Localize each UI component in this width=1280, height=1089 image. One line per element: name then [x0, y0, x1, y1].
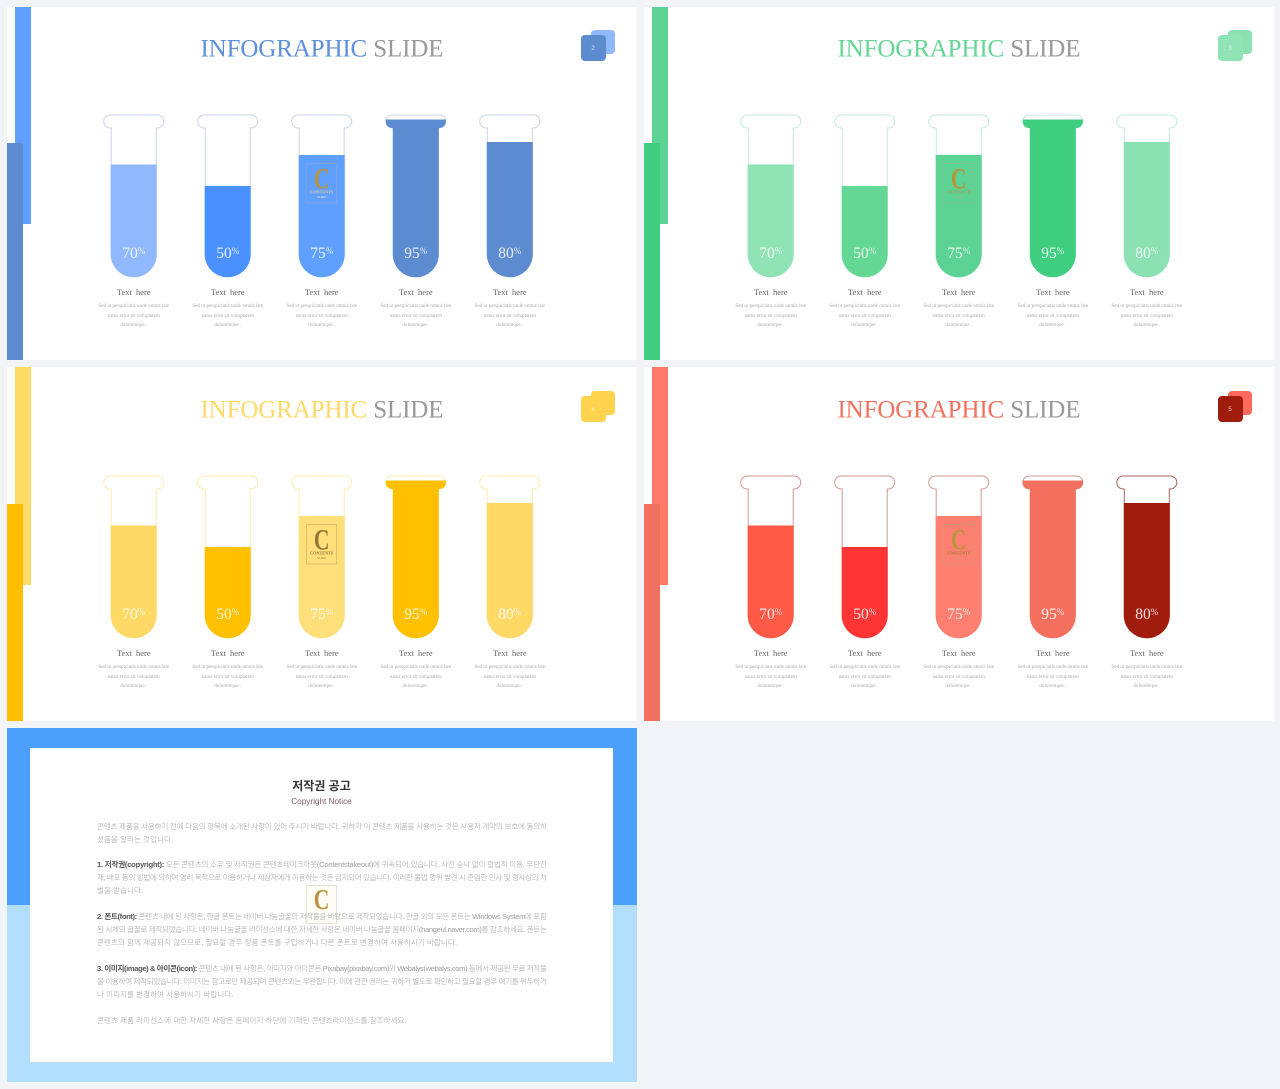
text block: copyright: 1. 저작권(copyright): 모든 콘텐츠의 소유 및 저작권은 콘텐츠테이크아웃(Contentstakeout)에 귀속되어 있습니다. 사전 승낙 없이 합법적 이용, 무단전	[97, 859, 547, 869]
tube 95%: %	[420, 607, 428, 617]
text block: intro: 콘텐츠 제품을 사용하기 전에 다음의 항목에 소개된 사항이 있어 주시기 바랍니다. 귀하가 이 콘텐츠 제품을 사용하는 것은 사용자 계약의 보호에 동의하	[97, 821, 547, 831]
text block: copyright: 벌을 받습니다.	[97, 886, 143, 895]
tube 50%: Sed ut perspiciatis unde omnis iste	[192, 303, 264, 309]
logo: gold C watermark	[306, 884, 336, 924]
tube 80%: 80	[1135, 606, 1151, 623]
icon: page badge	[581, 391, 615, 422]
tube 70%: %	[138, 246, 146, 256]
text block: font: 된 시체의 글꼴로 제작되었습니다. 네이버 나눔글꼴 라이선스에 대한 자세한 사항은 네이버 나눔글꼴 홈페이지(hangeul.naver.com)를 참조하세요. 폰트는	[97, 924, 547, 934]
tube 70%: Text here	[117, 648, 151, 658]
tube 50%	[829, 476, 901, 689]
tube 75% with logo: Text here	[942, 287, 976, 297]
logo: gold C: CONTENTS	[947, 550, 971, 556]
tube 80%: natus error sit voluptatem	[1121, 674, 1173, 680]
tube 75% with logo: doloremque .	[308, 683, 335, 689]
text block: image and icon	[97, 963, 547, 999]
tube 95%: Text here	[399, 648, 433, 658]
accent bars: blue	[7, 7, 31, 360]
text block: image and icon: 을 이용하여 제작되었습니다. 이미지는 참고로만 제공되며 콘텐츠와는 무관합니다. 이에 관한 권리는 귀하가 별도로 확인하고 필요할 경우 여기를 위두하거	[97, 976, 547, 986]
panel: green slide	[644, 7, 1274, 360]
tube 95%: 95	[1041, 606, 1057, 623]
tube 50%: 50	[853, 606, 869, 623]
tube 80%: Text here	[493, 287, 527, 297]
tube 50%: natus error sit voluptatem	[202, 313, 254, 319]
title: INFOGRAPHIC SLIDE	[838, 396, 1080, 424]
tube 70%	[98, 115, 170, 328]
logo: gold C: CONTENTS	[947, 190, 971, 194]
tube 75% with logo: Sed ut perspiciatis unde omnis iste	[923, 664, 995, 670]
tube 70%: Text here	[754, 287, 788, 297]
tube 80%	[474, 476, 546, 689]
logo: gold C: CONTENTS	[310, 550, 334, 556]
text block: license: 콘텐츠 제품 라이선스에 대한 자세한 사항은 홈페이지 하단에 기재된 콘텐츠라이선스를 참조하세요.	[97, 1015, 407, 1025]
tube 75% with logo: natus error sit voluptatem	[933, 674, 985, 680]
text block: copyright	[97, 859, 547, 895]
tube 80%: natus error sit voluptatem	[1121, 313, 1173, 319]
tube 70%: natus error sit voluptatem	[745, 674, 797, 680]
tube 75% with logo: natus error sit voluptatem	[933, 313, 985, 319]
icon: page badge: 4	[591, 407, 595, 413]
tube 75% with logo: Text here	[942, 648, 976, 658]
tube 70%: Text here	[117, 287, 151, 297]
tube 80%: Text here	[1130, 287, 1164, 297]
tube 50%: %	[232, 607, 240, 617]
tube 80%: Sed ut perspiciatis unde omnis iste	[474, 303, 546, 309]
tube 50%	[192, 476, 264, 689]
tube 80%: Sed ut perspiciatis unde omnis iste	[1111, 664, 1183, 670]
tube 50%: doloremque .	[851, 683, 878, 689]
logo: gold C: SLIDE	[954, 556, 963, 560]
tube 95%: %	[1057, 607, 1065, 617]
tube 75% with logo	[286, 476, 358, 689]
tube 95%: doloremque .	[1039, 322, 1066, 328]
tube 80%	[1111, 476, 1183, 689]
logo: gold C	[307, 162, 337, 203]
tube 95%: natus error sit voluptatem	[1027, 674, 1079, 680]
tube 50%: natus error sit voluptatem	[839, 313, 891, 319]
tube 80%: doloremque .	[1133, 683, 1160, 689]
icon: page badge	[1218, 30, 1252, 61]
tube 70%: %	[775, 607, 783, 617]
tube 95%: Sed ut perspiciatis unde omnis iste	[380, 303, 452, 309]
tube 75% with logo: %	[326, 246, 334, 256]
logo: gold C: CONTENTS	[310, 190, 334, 194]
icon: page badge: 3	[1228, 46, 1232, 52]
accent bars: green	[644, 7, 668, 360]
tube 50%: natus error sit voluptatem	[839, 674, 891, 680]
text block: image and icon: 나 이미지를 변경하여 사용하시기 바랍니다.	[97, 989, 233, 999]
tube 70%: 70	[759, 606, 775, 623]
tube 80%: doloremque .	[496, 683, 523, 689]
logo: gold C: SLIDE	[954, 195, 963, 199]
tube 75% with logo: natus error sit voluptatem	[296, 674, 348, 680]
tube 50%: %	[869, 246, 877, 256]
tube 80%: %	[514, 246, 522, 256]
tube 75% with logo: 75	[310, 245, 326, 262]
panel: yellow slide	[7, 367, 637, 721]
tube 70%: %	[775, 246, 783, 256]
tube 95%: doloremque .	[1039, 683, 1066, 689]
tube 50%: 50	[216, 245, 232, 262]
tube 70%: Sed ut perspiciatis unde omnis iste	[735, 664, 807, 670]
logo: gold C: SLIDE	[317, 556, 326, 560]
tube 80%: 80	[498, 606, 514, 623]
tube 50%: Text here	[211, 648, 245, 658]
tube 95%: doloremque .	[402, 683, 429, 689]
tube 50%: Sed ut perspiciatis unde omnis iste	[829, 664, 901, 670]
text block: font: 콘텐츠의 함께 제공되지 않으므로, 필요할 경우 정품 폰트를 구입하거나 다른 폰트로 변경하여 사용하시기 바랍니다.	[97, 937, 457, 947]
logo: gold C: C	[314, 162, 329, 195]
tube 70%: natus error sit voluptatem	[108, 313, 160, 319]
tube 80%: doloremque .	[1133, 322, 1160, 328]
text block: font: 2. 폰트(font): 콘텐츠 내에 된 사항은, 한글 폰트는 네이버 나눔글꼴의 저작물을 바탕으로 제작되었습니다. 한글 외의 모든 폰트는 Windows System에 포함	[97, 911, 547, 921]
tube 75% with logo	[923, 476, 995, 689]
icon: page badge	[581, 30, 615, 61]
tube 50%: Sed ut perspiciatis unde omnis iste	[829, 303, 901, 309]
icon: page badge: 5	[1228, 407, 1232, 413]
tube 50%: 50	[853, 245, 869, 262]
tube 95%: natus error sit voluptatem	[1027, 313, 1079, 319]
tube 50%: Text here	[211, 287, 245, 297]
tube 70%: doloremque .	[120, 683, 147, 689]
text block: intro: 셨음을 알리는 것입니다.	[97, 835, 173, 844]
tube 80%: 80	[498, 245, 514, 262]
tube 70%	[735, 476, 807, 689]
text block: font	[97, 911, 547, 947]
tube 75% with logo: Sed ut perspiciatis unde omnis iste	[286, 664, 358, 670]
tube 75% with logo: Text here	[305, 287, 339, 297]
tube 95%: natus error sit voluptatem	[390, 674, 442, 680]
accent bars: yellow	[7, 367, 31, 721]
tube 70%: 70	[122, 606, 138, 623]
tube 80%: Text here	[493, 648, 527, 658]
tube 75% with logo	[286, 115, 358, 328]
tube 80%: natus error sit voluptatem	[484, 313, 536, 319]
tube 80%: 80	[1135, 245, 1151, 262]
tube 80%: doloremque .	[496, 322, 523, 328]
tube 75% with logo: Text here	[305, 648, 339, 658]
tube 70%: doloremque .	[757, 683, 784, 689]
text block: image and icon: 3. 이미지(image) & 아이콘(icon): 콘텐츠 내에 된 사항은, 이미지와 아이콘은 Pixabay(pixabay.com)와 Webalys(webalys.com) 등에서 제공된 무료 저작물	[97, 963, 547, 973]
tube 70%: doloremque .	[757, 322, 784, 328]
tube 50%	[192, 115, 264, 328]
tube 95%: %	[420, 246, 428, 256]
tube 80%	[1111, 115, 1183, 328]
tube 75% with logo	[923, 115, 995, 328]
tube 75% with logo: doloremque .	[308, 322, 335, 328]
tube 95%: Sed ut perspiciatis unde omnis iste	[1017, 664, 1089, 670]
tube 50%: Text here	[848, 287, 882, 297]
tube 95%: doloremque .	[402, 322, 429, 328]
tube 70%: natus error sit voluptatem	[745, 313, 797, 319]
tube 50%: doloremque .	[214, 683, 241, 689]
tube 75% with logo: 75	[310, 606, 326, 623]
tube 50%: Sed ut perspiciatis unde omnis iste	[192, 664, 264, 670]
title: INFOGRAPHIC SLIDE	[838, 36, 1080, 62]
logo: gold C: C	[951, 162, 966, 195]
tube 75% with logo: Sed ut perspiciatis unde omnis iste	[286, 303, 358, 309]
tube 70%: natus error sit voluptatem	[108, 674, 160, 680]
tube 75% with logo: %	[963, 607, 971, 617]
tube 70%	[98, 476, 170, 689]
tube 95%: Text here	[1036, 287, 1070, 297]
text block: copyright: 재, 배포 등의 방법에 의하여 영리 목적으로 이용하거나 제삼자에게 이용하는 것은 금지되어 있습니다. 이러한 불법 행위 발견 시 준엄한 민사 및 형사상의 처	[97, 872, 547, 882]
tube 80%: natus error sit voluptatem	[484, 674, 536, 680]
tube 70%: 70	[122, 245, 138, 262]
tube 50%	[829, 115, 901, 328]
tube 70%: %	[138, 607, 146, 617]
tube 50%: Text here	[848, 648, 882, 658]
logo: gold C: SLIDE	[317, 195, 326, 199]
tube 95%: Sed ut perspiciatis unde omnis iste	[380, 664, 452, 670]
tube 95%	[380, 476, 452, 689]
heading: copyright notice: 저작권 공고	[292, 778, 351, 793]
tube 70%: doloremque .	[120, 322, 147, 328]
tube 50%: 50	[216, 606, 232, 623]
tube 80%: %	[1151, 607, 1159, 617]
tube 80%: Sed ut perspiciatis unde omnis iste	[474, 664, 546, 670]
tube 70%: Sed ut perspiciatis unde omnis iste	[98, 664, 170, 670]
text block: intro	[97, 821, 547, 844]
tube 80%: Sed ut perspiciatis unde omnis iste	[1111, 303, 1183, 309]
logo: gold C	[944, 162, 974, 203]
logo: gold C	[307, 523, 337, 564]
tube 50%: doloremque .	[214, 322, 241, 328]
tube 70%: 70	[759, 245, 775, 262]
tube 75% with logo: %	[326, 607, 334, 617]
panel: copyright notice	[7, 728, 637, 1082]
title: INFOGRAPHIC SLIDE	[200, 36, 444, 62]
tube 80%: %	[1151, 246, 1159, 256]
panel: blue slide	[7, 7, 637, 360]
tube 70%: Sed ut perspiciatis unde omnis iste	[735, 303, 807, 309]
tube 75% with logo: %	[963, 246, 971, 256]
panel: red slide	[644, 367, 1274, 721]
icon: page badge	[1218, 391, 1252, 422]
logo: gold C watermark: C	[314, 884, 329, 916]
tube 95%	[1017, 476, 1089, 689]
tube 70%	[735, 115, 807, 328]
tube 95%: 95	[404, 606, 420, 623]
tube 95%: 95	[404, 245, 420, 262]
tube 95%: 95	[1041, 245, 1057, 262]
tube 70%: Sed ut perspiciatis unde omnis iste	[98, 303, 170, 309]
tube 95%: %	[1057, 246, 1065, 256]
tube 95%	[1017, 115, 1089, 328]
logo: gold C: C	[314, 523, 329, 556]
tube 50%: %	[869, 607, 877, 617]
accent bars: red	[644, 367, 668, 721]
tube 80%	[474, 115, 546, 328]
tube 50%: %	[232, 246, 240, 256]
icon: page badge: 2	[591, 46, 595, 52]
tube 75% with logo: doloremque .	[945, 322, 972, 328]
tube 50%: doloremque .	[851, 322, 878, 328]
heading: copyright notice: Copyright Notice	[291, 797, 352, 806]
tube 75% with logo: 75	[947, 606, 963, 623]
tube 75% with logo: 75	[947, 245, 963, 262]
tube 95%: Text here	[399, 287, 433, 297]
tube 95%: natus error sit voluptatem	[390, 313, 442, 319]
tube 80%: %	[514, 607, 522, 617]
tube 75% with logo: doloremque .	[945, 683, 972, 689]
heading: copyright notice	[291, 778, 352, 806]
logo: gold C: C	[951, 523, 966, 556]
logo: gold C	[944, 523, 974, 564]
tube 50%: natus error sit voluptatem	[202, 674, 254, 680]
title: INFOGRAPHIC SLIDE	[200, 396, 444, 424]
tube 95%: Sed ut perspiciatis unde omnis iste	[1017, 303, 1089, 309]
tube 95%	[380, 115, 452, 328]
tube 70%: Text here	[754, 648, 788, 658]
tube 80%: Text here	[1130, 648, 1164, 658]
tube 75% with logo: Sed ut perspiciatis unde omnis iste	[923, 303, 995, 309]
tube 95%: Text here	[1036, 648, 1070, 658]
tube 75% with logo: natus error sit voluptatem	[296, 313, 348, 319]
